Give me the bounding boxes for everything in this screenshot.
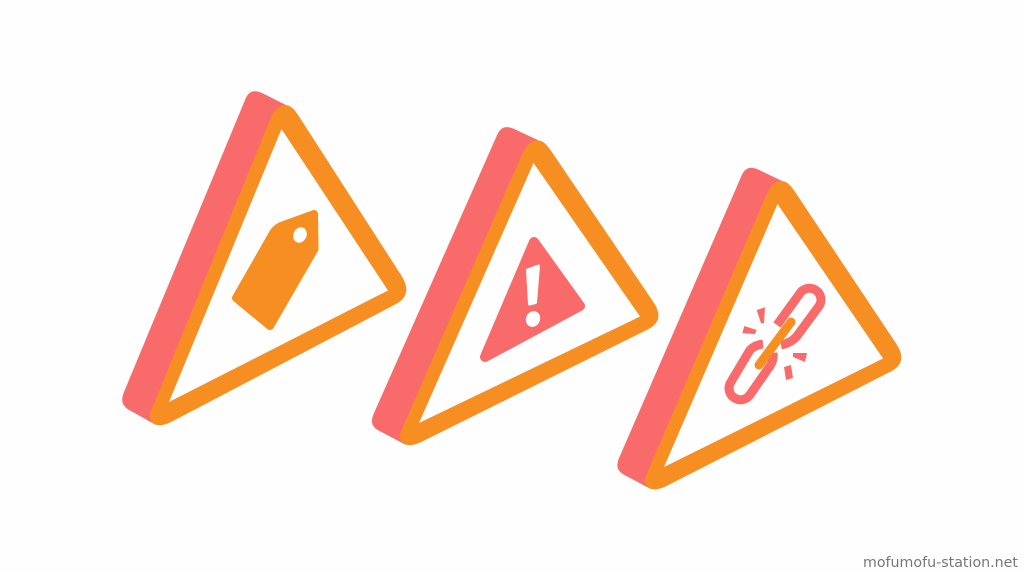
icon: exclamation warning sign <box>485 242 580 357</box>
side face and frame of triangle 2 <box>372 127 659 445</box>
side face and frame of triangle 3 <box>617 167 902 490</box>
orange frame of triangle 1 <box>150 105 406 425</box>
white interior of triangle 1 <box>169 129 388 402</box>
icon: price tag <box>236 214 314 326</box>
panel: warning triangle with exclamation mark <box>372 127 659 445</box>
panel: warning triangle with broken chain link <box>617 167 902 490</box>
panel: warning triangle with price tag <box>122 91 406 425</box>
red side face of triangle 1 <box>122 91 286 425</box>
icon: broken chain link <box>729 288 821 400</box>
watermark text: mofumofu-station.net <box>863 555 1019 571</box>
